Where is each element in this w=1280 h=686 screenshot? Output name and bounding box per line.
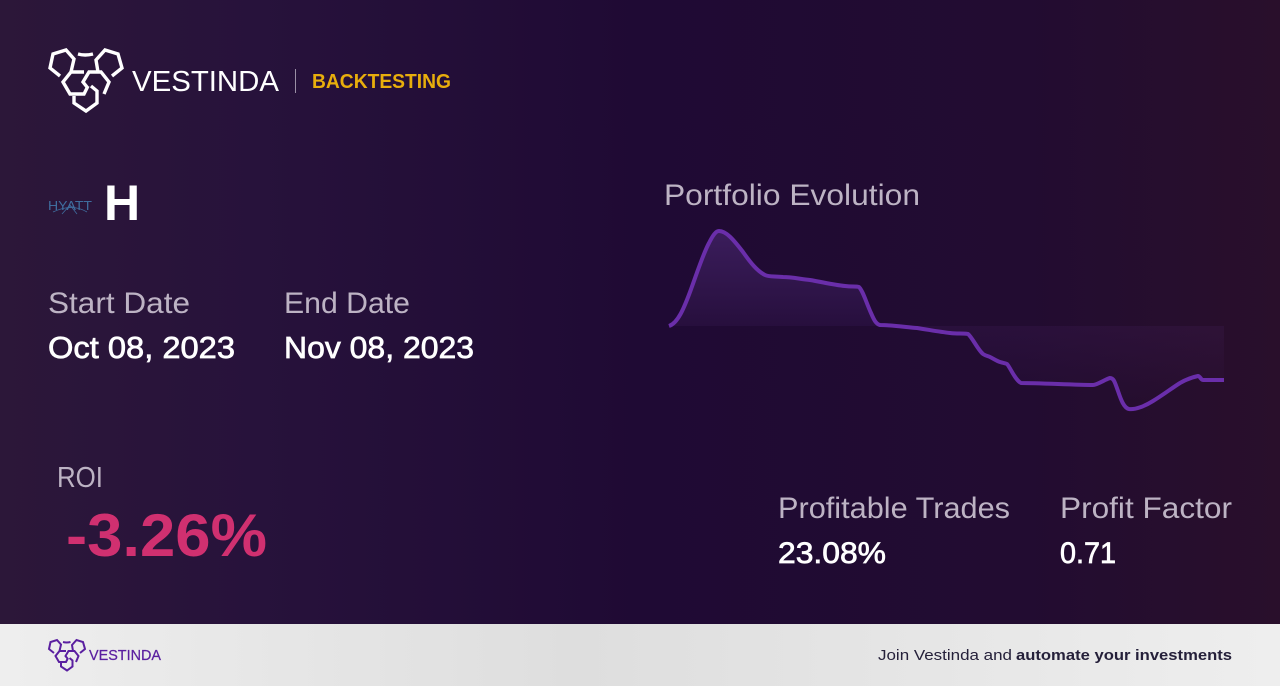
logo wordmark: VESTINDA bbox=[132, 66, 280, 98]
ticker symbol: H bbox=[104, 175, 140, 231]
section label: BACKTESTING bbox=[312, 71, 451, 93]
profit factor: Profit Factor bbox=[1060, 492, 1232, 525]
end date bbox=[284, 287, 474, 365]
start date: Oct 08, 2023 bbox=[48, 330, 235, 365]
footer wordmark: VESTINDA bbox=[89, 648, 161, 664]
profit factor bbox=[1060, 492, 1232, 570]
footer call to action: automate your investments bbox=[1016, 647, 1232, 664]
profitable trades bbox=[778, 492, 1010, 570]
icon: Vestinda hexagon logo bbox=[50, 50, 122, 111]
ticker with company logo bbox=[48, 175, 140, 231]
start date bbox=[48, 287, 235, 365]
footer call to action: Join Vestinda and bbox=[878, 647, 1012, 664]
profitable trades: Profitable Trades bbox=[778, 492, 1010, 525]
portfolio evolution heading: Portfolio Evolution bbox=[664, 179, 920, 212]
header: logo and section label bbox=[50, 50, 451, 111]
footer bar bbox=[0, 624, 1280, 686]
start date: Start Date bbox=[48, 287, 190, 320]
icon: Hyatt logo: HYATT bbox=[48, 199, 92, 213]
icon: footer Vestinda logo bbox=[49, 640, 85, 670]
end date: Nov 08, 2023 bbox=[284, 330, 474, 365]
profit factor: 0.71 bbox=[1060, 537, 1116, 570]
profitable trades: 23.08% bbox=[778, 537, 886, 570]
ROI bbox=[57, 462, 267, 569]
line chart: portfolio evolution bbox=[669, 231, 1224, 409]
end date: End Date bbox=[284, 287, 410, 320]
ROI: ROI bbox=[57, 462, 103, 494]
ROI: -3.26% bbox=[66, 502, 267, 569]
